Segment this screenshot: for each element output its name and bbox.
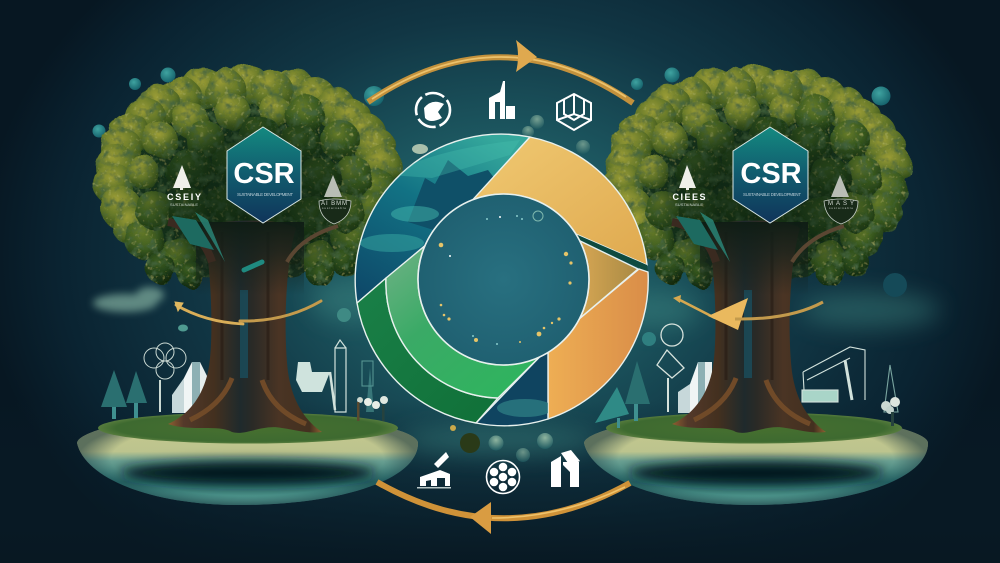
left tree emblem: [167, 165, 201, 207]
icon: recycle globe: [416, 93, 450, 127]
grass: [606, 412, 902, 444]
badge subtitle: SUSTAINABLE DEVELOPMENT: [743, 192, 801, 197]
branches: [168, 212, 338, 270]
inner circle: [418, 194, 589, 365]
right scenery: [595, 324, 900, 428]
dark divider band: [576, 234, 648, 272]
pine trees: [595, 361, 650, 428]
central ring chart: [355, 134, 648, 426]
left island: [77, 412, 418, 505]
segment: orange: [548, 269, 648, 419]
icon: factory building: [489, 81, 515, 119]
small cloud: [93, 287, 164, 312]
right shield emblem: MASY: [828, 201, 854, 207]
segment: dark blue: [476, 352, 553, 426]
icon: bar blocks: [551, 450, 580, 487]
pine trees: [101, 370, 147, 419]
left shield emblem: sustainable: [322, 206, 346, 210]
icon: telescope: [417, 452, 451, 488]
blossom bush: [881, 397, 900, 426]
segment: gold: [473, 137, 647, 265]
left scenery: [101, 340, 388, 421]
segment: dark green: [357, 278, 498, 423]
right shield emblem: [824, 175, 858, 224]
trunk arrow right: [673, 295, 823, 330]
line tree: [144, 343, 186, 412]
left tree: [93, 64, 402, 433]
crown shade: [134, 100, 370, 280]
inner circle gold dots: [439, 211, 573, 345]
icon: wheel: [486, 460, 520, 494]
icon: cube frame: [557, 94, 591, 130]
left shield emblem: [319, 175, 351, 224]
background clouds: [310, 278, 940, 454]
right tree: [603, 64, 912, 433]
crown: [93, 64, 402, 287]
crown shade: [642, 100, 878, 280]
grass: [98, 412, 398, 444]
line crane: [802, 347, 898, 412]
crown: [603, 64, 912, 287]
trunk: [672, 220, 826, 433]
left tree emblem: SUSTAINABLE: [170, 202, 198, 207]
segment: light green: [386, 246, 540, 398]
top cycle arrow: [368, 40, 633, 103]
bottom cycle arrow: [377, 482, 630, 534]
right line machine: [296, 340, 374, 412]
segment: dark gold: [580, 241, 638, 319]
line clock and tree: [657, 324, 684, 412]
left CSR badge: [227, 127, 301, 223]
right tree emblem: CIEES: [672, 192, 706, 202]
right tree emblem: [672, 165, 706, 207]
branches: [672, 212, 844, 262]
trunk arrow left: [175, 301, 321, 324]
trunk: [168, 220, 322, 433]
white buildings: [678, 362, 712, 413]
right tree emblem: SUSTAINABLE: [675, 202, 703, 207]
right shield emblem: sustainable: [829, 206, 853, 210]
blossom trees: [357, 396, 388, 421]
floating spheres: [92, 68, 907, 462]
left shield emblem: AI BMM: [321, 201, 347, 207]
segment: teal landscape: [355, 134, 530, 303]
left tree emblem: CSEIY: [167, 192, 201, 202]
CSR text: CSR: [740, 158, 802, 190]
right island: [584, 412, 928, 505]
white buildings: [172, 362, 208, 413]
CSR text: CSR: [233, 158, 295, 190]
badge subtitle: SUSTAINABLE DEVELOPMENT: [237, 192, 293, 197]
right CSR badge: [733, 127, 808, 223]
